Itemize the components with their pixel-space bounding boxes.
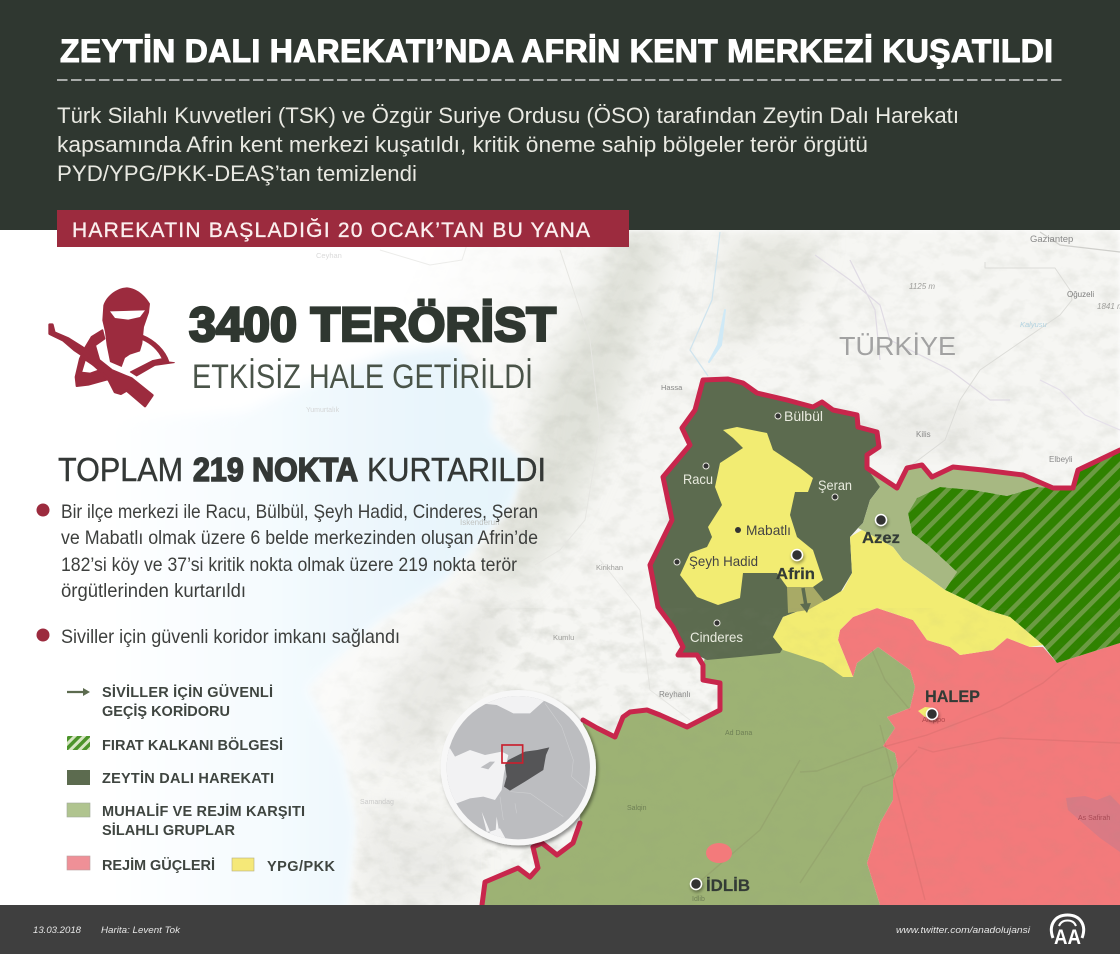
city: Afrin bbox=[776, 550, 815, 583]
heading: 219 nokta: KURTARILDI bbox=[367, 451, 546, 488]
AA logo bbox=[1051, 915, 1084, 949]
hood and torso bbox=[102, 287, 150, 367]
city: Mabatlı: Mabatlı bbox=[746, 522, 791, 538]
heading: 219 nokta: TOPLAM bbox=[58, 451, 183, 488]
bullet 1: örgütlerinden kurtarıldı bbox=[61, 580, 246, 602]
map city labels bbox=[627, 408, 1110, 903]
dashed rule bbox=[57, 79, 1064, 81]
map place labels: Hassa bbox=[661, 383, 683, 392]
city: Cinderes bbox=[690, 620, 743, 645]
bullet 1: ve Mabatlı olmak üzere 6 belde merkezinden oluşan Afrin’de bbox=[61, 527, 538, 549]
map place labels: Kirikhan bbox=[596, 563, 623, 572]
roads and rivers bbox=[380, 232, 1120, 720]
hillshade over zones bbox=[482, 608, 1120, 905]
legend: opposition: MUHALİF VE REJİM KARŞITI bbox=[102, 803, 305, 820]
header panel bbox=[0, 0, 1120, 230]
banner: HAREKATIN BAŞLADIĞI 20 OCAK’TAN BU YANA bbox=[72, 219, 590, 242]
city: Bülbül: Bülbül bbox=[784, 408, 823, 424]
city: Cinderes: Cinderes bbox=[690, 629, 743, 645]
map place labels: Kilis bbox=[916, 430, 931, 439]
city: İdlib bbox=[690, 876, 750, 903]
legend: regime: REJİM GÜÇLERİ bbox=[102, 857, 215, 874]
map place labels: Gaziantep bbox=[1030, 234, 1073, 245]
city: Racu: Racu bbox=[683, 471, 713, 487]
city: Racu bbox=[683, 463, 713, 487]
map background bbox=[236, 230, 1120, 905]
heading: 219 nokta: 219 NOKTA bbox=[193, 451, 358, 488]
small label: Salqin: Salqin bbox=[627, 805, 647, 812]
city: Halep: Aleppo bbox=[922, 715, 945, 724]
Red Sea and Gulf bbox=[482, 812, 506, 838]
arrow: corridor bbox=[800, 588, 811, 613]
AA logo: AA bbox=[1054, 926, 1081, 949]
eye opening bbox=[110, 310, 145, 320]
Syria bbox=[504, 747, 549, 791]
headline: 3400 terörist: 3400 TERÖRİST bbox=[189, 299, 556, 352]
zone: YPG/PKK central Afrin bbox=[680, 427, 823, 605]
legend: corridor arrow: SİVİLLER İÇİN GÜVENLİ bbox=[102, 684, 273, 701]
city: Azez bbox=[862, 514, 900, 547]
small label: As Safirah: As Safirah bbox=[1078, 815, 1110, 822]
heading: 219 nokta bbox=[58, 451, 546, 488]
city: Halep: HALEP bbox=[925, 687, 980, 706]
footer credit: Harita: Levent Tok bbox=[101, 925, 181, 936]
city: Halep bbox=[922, 687, 980, 724]
inset borders bbox=[500, 703, 587, 820]
zone: salt lake patch bbox=[1066, 795, 1120, 852]
legend: opposition: SİLAHLI GRUPLAR bbox=[102, 822, 236, 839]
sea: Gulf of Iskenderun bbox=[0, 345, 527, 915]
city: Afrin: Afrin bbox=[776, 566, 815, 583]
roads over zones bbox=[690, 650, 1120, 900]
Black Sea bbox=[486, 696, 544, 714]
footer date: 13.03.2018 bbox=[33, 925, 82, 936]
Halep YPG pocket bbox=[918, 707, 936, 717]
border line: Turkey - Syria bbox=[482, 379, 1120, 905]
legend: corridor arrow bbox=[67, 684, 273, 720]
zone: Zeytin Dalı operation area bbox=[650, 379, 880, 660]
legend: opposition bbox=[67, 803, 305, 839]
city: Azez: Azez bbox=[862, 530, 900, 547]
intro paragraph: PYD/YPG/PKK-DEAŞ’tan temizlendi bbox=[57, 161, 417, 186]
map place labels: Samandag bbox=[360, 799, 394, 806]
map place labels: Yumurtalık bbox=[306, 407, 340, 414]
bullet list bbox=[36, 501, 538, 648]
map place labels: Kumlu bbox=[553, 633, 574, 642]
city: İdlib: Idlib bbox=[692, 896, 705, 903]
map place labels: Ceyhan bbox=[316, 251, 342, 260]
title: ZEYTİN DALI HAREKATI’NDA AFRİN KENT MERKEZİ KUŞATILDI bbox=[60, 33, 1053, 69]
legend: Zeytin Dalı: ZEYTİN DALI HAREKATI bbox=[102, 770, 274, 787]
legend bbox=[67, 684, 336, 875]
inset locator globe bbox=[440, 690, 597, 847]
map place labels: Kalyusu bbox=[1020, 320, 1048, 329]
bullet 1: 182’si köy ve 37’si kritik nokta olmak üzere 219 nokta terör bbox=[61, 554, 517, 576]
country label: TÜRKİYE: TÜRKİYE bbox=[839, 331, 956, 361]
legend: Fırat Kalkanı: FIRAT KALKANI BÖLGESİ bbox=[102, 737, 283, 754]
icon: masked gunman bbox=[50, 287, 174, 406]
banner bbox=[57, 210, 629, 247]
city: Şeran bbox=[818, 477, 852, 500]
legend: regime bbox=[67, 856, 215, 874]
rifle bbox=[50, 325, 152, 406]
map place labels bbox=[306, 234, 1120, 806]
city: Şeran: Şeran bbox=[818, 477, 852, 493]
zone: opposition-held Idlib area bbox=[482, 640, 915, 905]
footer bbox=[0, 905, 1120, 954]
Afrin locator square bbox=[502, 745, 523, 763]
legend: YPG/PKK bbox=[232, 858, 336, 875]
map place labels: 1125 m bbox=[909, 282, 935, 291]
map place labels: Oğuzeli bbox=[1067, 290, 1094, 299]
subheadline: ETKİSİZ HALE GETİRİLDİ bbox=[192, 358, 533, 396]
zone: Fırat Kalkanı hatched area bbox=[908, 448, 1120, 663]
bullet 1 bbox=[36, 501, 538, 602]
Mediterranean bbox=[440, 748, 508, 803]
Cyprus bbox=[481, 762, 495, 769]
zone: YPG/PKK Tel Rifaat corridor bbox=[773, 530, 1043, 677]
city: İdlib: İDLİB bbox=[706, 876, 750, 895]
map place labels: Reyhanlı bbox=[659, 690, 691, 699]
zone: opposition groups near Azez bbox=[858, 465, 1053, 590]
footer url: www.twitter.com/anadolujansi bbox=[896, 925, 1031, 936]
land and terrain shading bbox=[315, 230, 1120, 905]
left arm bbox=[76, 330, 110, 386]
zone: civilian corridor bbox=[787, 587, 824, 613]
map place labels: Iskenderun bbox=[460, 518, 500, 527]
İdlib regime pocket bbox=[706, 843, 732, 863]
map: control zones bbox=[482, 379, 1120, 905]
intro paragraph: Türk Silahlı Kuvvetleri (TSK) ve Özgür Suriye Ordusu (ÖSO) tarafından Zeytin Dalı Harekatı bbox=[57, 103, 959, 128]
small label: Ad Dana: Ad Dana bbox=[725, 730, 752, 737]
bullet 1: Bir ilçe merkezi ile Racu, Bülbül, Şeyh Hadid, Cinderes, Şeran bbox=[61, 501, 538, 523]
intro paragraph: kapsamında Afrin kent merkezi kuşatıldı, kritik öneme sahip bölgeler terör örgütü bbox=[57, 132, 868, 157]
bullet 2: Siviller için güvenli koridor imkanı sağlandı bbox=[61, 626, 400, 648]
legend: YPG/PKK: YPG/PKK bbox=[267, 859, 336, 875]
legend: corridor arrow: GEÇİŞ KORİDORU bbox=[102, 703, 230, 720]
map place labels: Elbeyli bbox=[1049, 455, 1073, 464]
intro paragraph bbox=[57, 103, 959, 186]
zone: regime forces bbox=[838, 608, 1120, 905]
city: Şeyh Hadid: Şeyh Hadid bbox=[689, 553, 758, 569]
right arm bbox=[130, 335, 174, 376]
